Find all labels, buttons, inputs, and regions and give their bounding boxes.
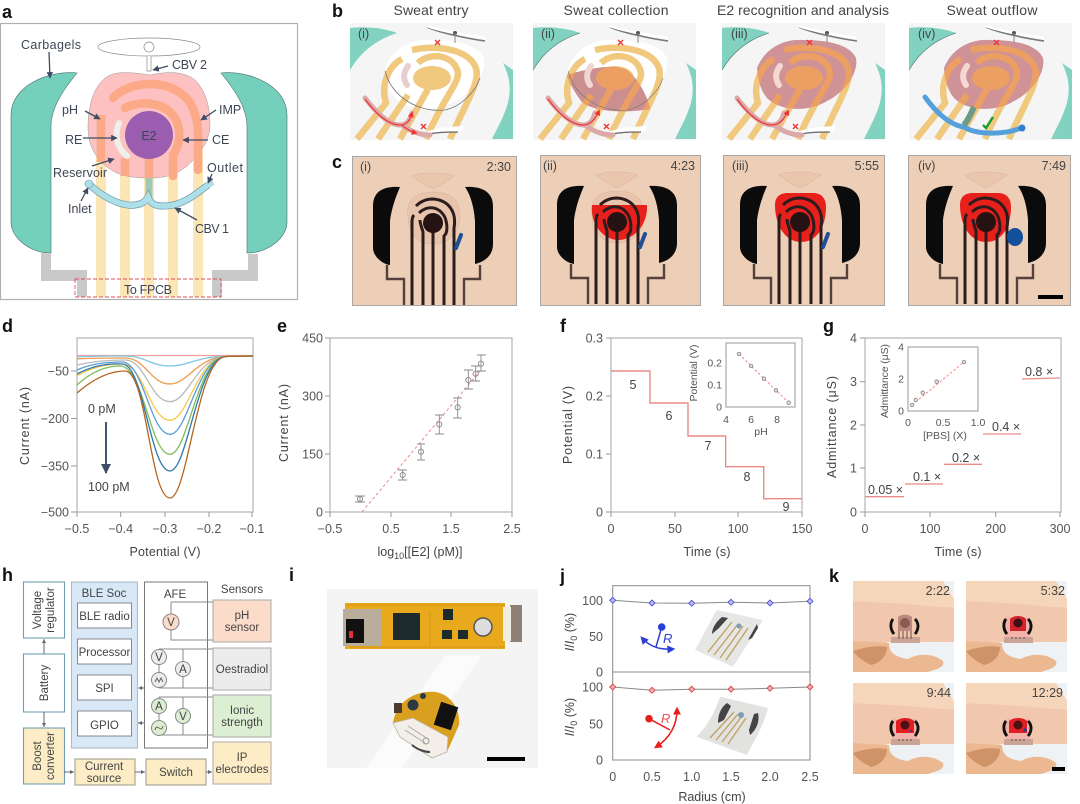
chart f: potential steps vs pH: 100 (728, 522, 748, 536)
boost converter block: Boost (32, 740, 44, 771)
scale bar (487, 757, 525, 761)
inset: admittance vs PBS: 1.0 (971, 417, 985, 429)
inset: admittance vs PBS: 0.5 (936, 417, 950, 429)
panel b headings: Sweat outflow (946, 2, 1038, 18)
schematic labels: CBV 1 (195, 222, 229, 236)
chart g: admittance steps: 0 (850, 506, 857, 520)
lower plot: inward bending: 50 (589, 718, 603, 732)
inset: admittance vs PBS: Admittance (μS) (879, 344, 891, 418)
current source block (75, 759, 135, 785)
chart j: bending stability: 0 (569, 636, 579, 641)
device photo (697, 697, 768, 755)
RE electrode (117, 123, 127, 156)
chart j: bending stability: 0 (569, 721, 579, 726)
chart d: current vs potential (18, 338, 264, 559)
panel c (ii): photo 4:23: 4:23 (671, 159, 695, 173)
label: E2: E2 (141, 129, 157, 143)
switch block: Switch (159, 767, 193, 779)
chart e: calibration: 150 (302, 448, 323, 462)
sensors column: strength (221, 717, 263, 729)
chart g: admittance steps: 3 (850, 375, 857, 389)
panel b (iv): sweat outflow: (iv) (918, 27, 935, 41)
boost converter block (24, 728, 64, 784)
inset: potential vs pH: 6 (748, 414, 754, 426)
scale bar (1052, 767, 1065, 771)
panel b (iv): sweat outflow (909, 23, 1072, 140)
icon: right carbagel (221, 73, 287, 253)
flexible circuit board (343, 603, 522, 649)
sensors column: Oestradiol (216, 664, 268, 676)
inset: admittance vs PBS (879, 342, 985, 442)
chart f: potential steps vs pH: 6 (666, 409, 673, 423)
chart e: calibration: −0.5 (318, 522, 342, 536)
E2 electrode (125, 111, 173, 159)
chart f: potential steps vs pH: 7 (705, 439, 712, 453)
panel a: device schematic (0, 24, 298, 300)
pointer arrows (49, 52, 216, 220)
BLE SoC block: BLE radio (79, 611, 130, 623)
panel k: photo 12:29 (966, 683, 1067, 774)
chart g: admittance steps: 0.8 × (1025, 365, 1053, 379)
panel c (ii): photo 4:23: (ii) (543, 159, 557, 173)
schematic labels: CBV 2 (172, 58, 207, 72)
chart j: bending stability: 1.5 (722, 770, 740, 784)
chart f: potential steps vs pH: 0 (608, 522, 615, 536)
icon: red bend arrows (645, 709, 677, 747)
electrodes (101, 84, 198, 178)
upper plot: outward bending: 100 (582, 594, 603, 608)
chart g: admittance steps: 200 (985, 522, 1006, 536)
boost converter block: converter (45, 732, 57, 780)
panel k: photo 2:22 (853, 581, 954, 672)
chart d: current vs potential: −0.2 (197, 522, 221, 536)
panel label: d: d (2, 316, 13, 336)
AFE block: V (179, 711, 187, 723)
schematic labels: pH (62, 103, 78, 117)
sensors column: Sensors (221, 584, 263, 596)
chart d: current vs potential: −0.3 (153, 522, 177, 536)
chart e: calibration (277, 332, 521, 561)
panel k: photo 5:32: 5:32 (1041, 584, 1065, 598)
inset: potential vs pH: Potential (V) (688, 344, 700, 402)
chart j: bending stability: 2.5 (801, 770, 819, 784)
inset: admittance vs PBS: 0 (898, 406, 904, 418)
BLE SoC block: SPI (95, 683, 114, 695)
AFE block: A (179, 664, 187, 676)
inset: admittance vs PBS: [PBS] (X) (923, 430, 967, 442)
chart g: admittance steps: 0.1 × (913, 470, 941, 484)
panel h: block diagram (24, 582, 271, 785)
panel c (iv): photo 7:49: (iv) (918, 159, 935, 173)
top valve CBV 2 (98, 38, 200, 71)
sensors column: electrodes (215, 764, 269, 776)
panel c (iii): photo 5:55 (724, 156, 884, 306)
panel label: b: b (332, 1, 343, 21)
chart j: bending stability: (%) (563, 613, 577, 636)
chart g: admittance steps: 0.05 × (868, 483, 903, 497)
chart g: admittance steps (825, 332, 1070, 559)
chart f: potential steps vs pH: 50 (668, 522, 682, 536)
inset: admittance vs PBS: 0 (905, 417, 911, 429)
panel i: device photo (327, 589, 538, 768)
chart j: bending stability: (%) (563, 698, 577, 721)
chart e: calibration: 0.5 (382, 522, 400, 536)
panel b headings: Sweat entry (394, 2, 468, 18)
panel label: i: i (289, 565, 294, 585)
sensors column: sensor (225, 622, 259, 634)
panel c (iii): photo 5:55: 5:55 (855, 159, 879, 173)
AFE block: V (167, 617, 175, 629)
icon: blue bend arrows: R (663, 631, 672, 646)
inset: potential vs pH (688, 343, 795, 438)
panel c (i): photo 2:30 (352, 156, 516, 306)
icon: left carbagel (11, 73, 77, 253)
battery block (24, 654, 64, 712)
chart f: potential steps vs pH: 0.3 (586, 332, 603, 346)
chart g: admittance steps: 2 (850, 418, 857, 432)
sensors column: pH (235, 610, 249, 622)
chart j: bending stability: I/I (563, 641, 577, 651)
chart j: bending stability (563, 586, 819, 804)
switch block (146, 759, 206, 785)
chart f: potential steps vs pH (561, 332, 812, 559)
chart e: calibration: 2.5 (503, 522, 521, 536)
chart f: potential steps vs pH: 9 (783, 500, 790, 514)
voltage regulator block: Voltage (32, 591, 44, 629)
schematic labels: To FPCB (124, 283, 172, 297)
chart j: bending stability: Radius (cm) (678, 790, 746, 804)
schematic labels: RE (65, 133, 82, 147)
panel label: e: e (277, 316, 287, 336)
chart j: bending stability: I/I (563, 726, 577, 736)
AFE block (144, 582, 213, 748)
panel b (i): sweat entry: (i) (358, 27, 369, 41)
chart d: current vs potential: 0 pM (88, 402, 116, 416)
chart d: current vs potential: Potential (V) (130, 545, 200, 559)
chart f: potential steps vs pH: 0.2 (586, 390, 603, 404)
schematic labels: IMP (219, 103, 241, 117)
panel k: photo 5:32 (966, 581, 1067, 672)
chart e: calibration: 300 (302, 390, 323, 404)
schematic labels: CE (212, 133, 229, 147)
chart d: current vs potential: −50 (48, 364, 69, 378)
chart j: bending stability: 1.0 (683, 770, 700, 784)
chart d: current vs potential: −0.1 (240, 522, 264, 536)
panel k: photo 9:44: 9:44 (927, 686, 951, 700)
voltage regulator block (24, 582, 64, 638)
microfluidic channel (85, 178, 213, 206)
chart f: potential steps vs pH: 150 (792, 522, 812, 536)
icon: blue bend arrows (642, 623, 673, 649)
BLE SoC block: BLE Soc (82, 588, 127, 600)
AFE block: AFE (164, 589, 187, 601)
panel b (ii): sweat collection: (ii) (541, 27, 555, 41)
chart e: calibration: 450 (302, 332, 323, 346)
chart e: calibration: 1.5 (442, 522, 460, 536)
sensors column: Ionic (230, 705, 254, 717)
chart g: admittance steps: 4 (850, 332, 857, 346)
panel label: f: f (560, 316, 567, 336)
panel label: h: h (2, 565, 13, 585)
panel c (ii): photo 4:23 (540, 156, 700, 306)
BLE SoC block: Processor (79, 647, 131, 659)
chart j: bending stability: 0 (609, 770, 616, 784)
AFE block: V (155, 652, 163, 664)
panel label: a: a (2, 2, 13, 22)
sensors column: IP (237, 752, 248, 764)
current source block: source (87, 773, 121, 785)
chart e: calibration: 10 (394, 551, 404, 561)
current source block: Current (85, 761, 124, 773)
connectors: grey traces (41, 253, 258, 297)
battery block: Battery (39, 665, 51, 701)
upper plot: outward bending: 0 (596, 666, 603, 680)
device photo (695, 610, 763, 667)
inset: admittance vs PBS: 4 (898, 342, 904, 354)
chart d: current vs potential: −200 (41, 412, 69, 426)
panel c (iv): photo 7:49: 7:49 (1042, 159, 1066, 173)
AFE block: A (155, 701, 163, 713)
schematic labels: Carbagels (21, 38, 81, 52)
panel label: k: k (829, 566, 840, 586)
chart g: admittance steps: Admittance (μS) (825, 376, 839, 478)
connection arrows (44, 639, 212, 772)
inset: potential vs pH: 0 (716, 402, 722, 414)
chart j: bending stability: 0.5 (643, 770, 661, 784)
BLE SoC block: GPIO (90, 720, 119, 732)
chart g: admittance steps: 100 (920, 522, 940, 536)
panel c (i): photo 2:30: (i) (360, 160, 371, 174)
chart d: current vs potential: −0.4 (108, 522, 133, 536)
lower plot: inward bending: 100 (582, 680, 603, 694)
scale bar (1038, 295, 1063, 299)
panel b headings (394, 2, 1038, 18)
chart d: current vs potential: −0.5 (65, 522, 89, 536)
chart g: admittance steps: 0.4 × (992, 420, 1020, 434)
panel c (iv): photo 7:49 (908, 156, 1070, 306)
panel b (iii): E2 recognition and analysis: (iii) (731, 27, 748, 41)
chart e: calibration: [[E2] (pM)] (404, 545, 463, 559)
dashed FPCB outline (75, 279, 221, 297)
schematic labels (21, 38, 244, 297)
inset: potential vs pH: 0.2 (707, 358, 722, 370)
chart g: admittance steps: Time (s) (934, 545, 982, 559)
inset: admittance vs PBS: 2 (898, 374, 904, 386)
device wrapped around tube (393, 692, 459, 758)
panel b (iii): E2 recognition and analysis (722, 23, 885, 140)
panel b headings: Sweat collection (564, 2, 668, 18)
schematic labels: Inlet (68, 202, 92, 216)
chart f: potential steps vs pH: Potential (V) (561, 386, 575, 464)
chart f: potential steps vs pH: 0.1 (586, 448, 603, 462)
chart g: admittance steps: 0 (862, 522, 869, 536)
upper plot: outward bending (582, 586, 813, 680)
schematic labels: Reservoir (53, 166, 107, 180)
sensors column (213, 584, 271, 784)
chart d: current vs potential: 100 pM (88, 480, 130, 494)
panel k: photo 12:29: 12:29 (1032, 686, 1063, 700)
chart j: bending stability: 2.0 (761, 770, 779, 784)
chart d: current vs potential: −500 (41, 506, 69, 520)
chart d: current vs potential: Current (nA) (18, 387, 32, 465)
panel label: g: g (823, 316, 834, 336)
connectors: yellow traces (96, 150, 203, 297)
inset: potential vs pH: 0.1 (707, 380, 722, 392)
chart d: current vs potential: −350 (41, 460, 69, 474)
panel k: photo 2:22: 2:22 (926, 584, 950, 598)
chart e: calibration: log (377, 545, 394, 559)
panel label: c: c (332, 152, 342, 172)
panel b (i): sweat entry (350, 23, 513, 140)
panel k: photo 9:44 (853, 683, 954, 774)
voltage regulator block: regulator (45, 587, 57, 633)
chart e: calibration: Current (nA) (277, 384, 291, 462)
panel c (iii): photo 5:55: (iii) (732, 159, 749, 173)
icon: red bend arrows: R (661, 711, 670, 726)
chart f: potential steps vs pH: Time (s) (684, 545, 730, 559)
panel b (ii): sweat collection (533, 23, 696, 140)
panel label: j: j (559, 566, 565, 586)
lower plot: inward bending (582, 672, 813, 768)
chart f: potential steps vs pH: 5 (630, 378, 637, 392)
chart g: admittance steps: 300 (1050, 522, 1070, 536)
chart g: admittance steps: 1 (850, 462, 857, 476)
chart g: admittance steps: 0.2 × (952, 451, 980, 465)
inset: potential vs pH: 4 (723, 414, 729, 426)
chart e: calibration: 0 (316, 506, 323, 520)
BLE SoC block (72, 582, 138, 748)
chart f: potential steps vs pH: 0 (596, 506, 603, 520)
panel c (i): photo 2:30: 2:30 (487, 160, 511, 174)
chart f: potential steps vs pH: 8 (744, 470, 751, 484)
lower plot: inward bending: 0 (596, 754, 603, 768)
inset: potential vs pH: pH (754, 426, 768, 438)
upper plot: outward bending: 50 (589, 630, 603, 644)
panel b headings: E2 recognition and analysis (717, 2, 889, 18)
reservoir (88, 73, 210, 178)
inset: potential vs pH: 8 (774, 414, 780, 426)
schematic labels: Outlet (207, 161, 244, 175)
